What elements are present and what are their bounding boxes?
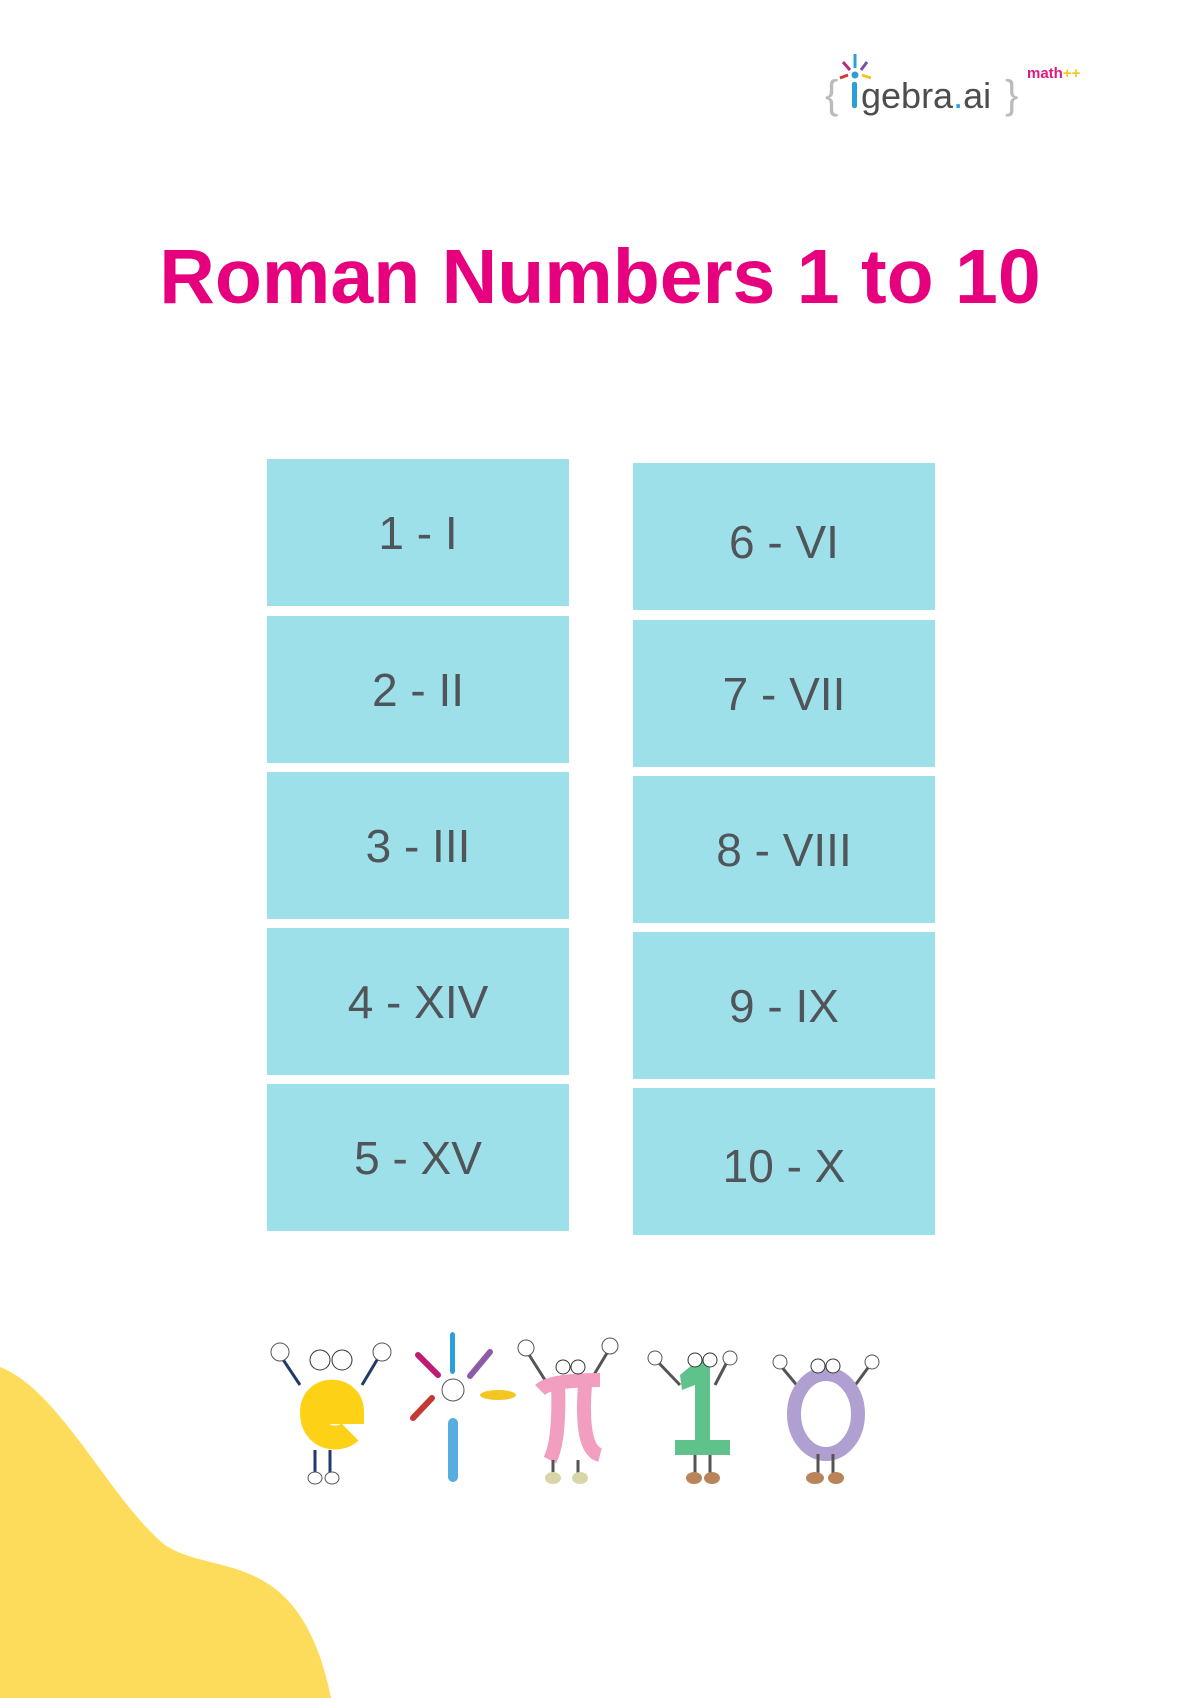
characters illustration (270, 1332, 880, 1484)
card 3 (267, 772, 569, 919)
card 10: 10 - X (723, 1140, 845, 1192)
logo: math++ (1027, 65, 1081, 82)
card 9 (633, 932, 935, 1079)
card 7: 7 - VII (723, 668, 845, 720)
card 1: 1 - I (378, 506, 458, 558)
card 9: 9 - IX (729, 980, 839, 1032)
panel: right column (633, 463, 935, 1235)
card 6 (633, 463, 935, 610)
card 7 (633, 620, 935, 767)
card 1 (267, 459, 569, 606)
panel: left column (267, 459, 569, 1231)
icon: e character (271, 1343, 391, 1484)
card 10 (633, 1088, 935, 1235)
card 4 (267, 928, 569, 1075)
logo: } (1005, 73, 1018, 117)
card 6: 6 - VI (729, 516, 839, 568)
card 2: 2 - II (372, 664, 464, 716)
card 5 (267, 1084, 569, 1231)
icon: pi character (518, 1338, 618, 1484)
logo (825, 54, 1081, 117)
icon: 1 character (648, 1351, 737, 1484)
card 5: 5 - XV (354, 1132, 482, 1184)
card 4: 4 - XIV (348, 976, 488, 1028)
logo: gebra.ai (861, 75, 991, 116)
icon: i sparkle (840, 54, 871, 108)
card 8 (633, 776, 935, 923)
card 8: 8 - VIII (716, 824, 852, 876)
logo: { (825, 73, 838, 117)
card 3: 3 - III (366, 820, 470, 872)
card 2 (267, 616, 569, 763)
icon: i character (413, 1332, 516, 1482)
title: Roman Numbers 1 to 10 (159, 234, 1041, 320)
icon: 0 character (773, 1355, 879, 1484)
